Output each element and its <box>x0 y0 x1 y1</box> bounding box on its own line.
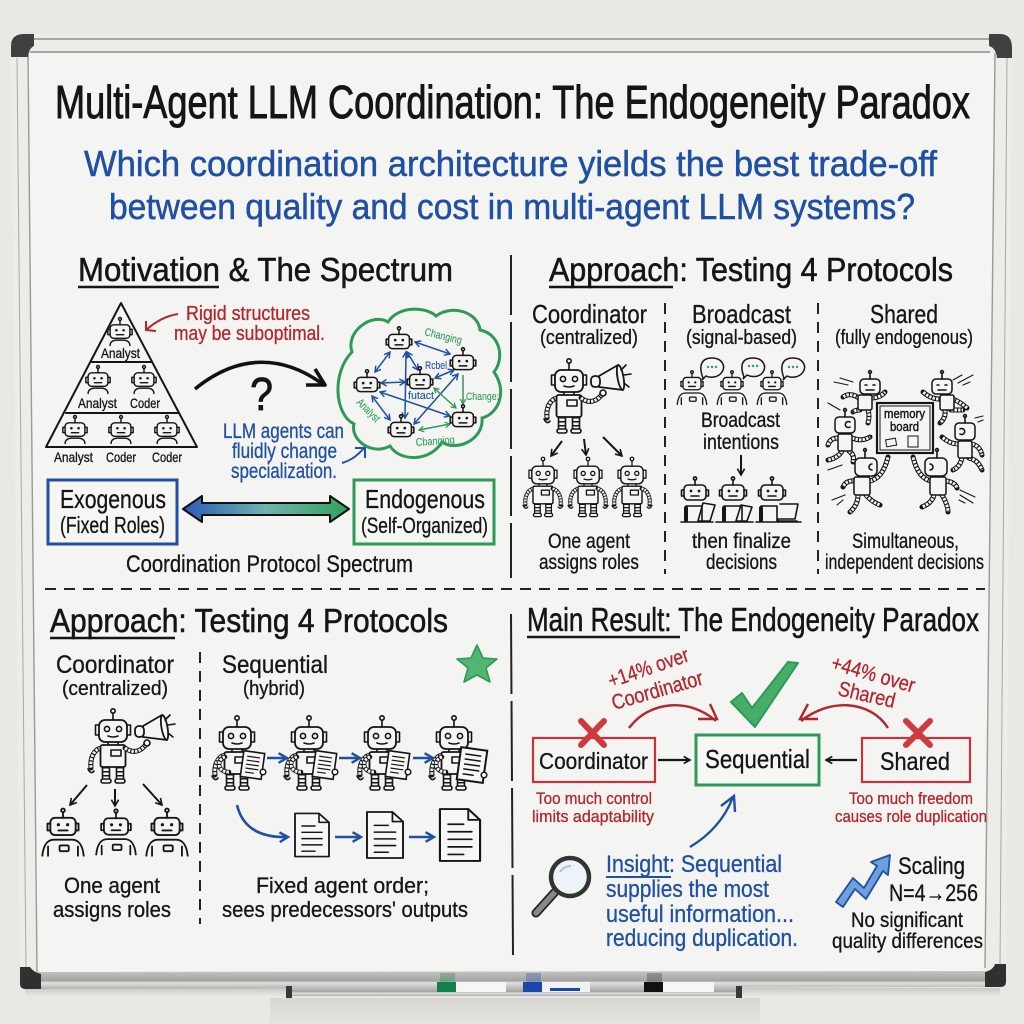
cloud of self-organized agents: Analyst <box>354 397 382 425</box>
insight text: useful information... <box>606 901 794 928</box>
marker: green <box>437 982 506 992</box>
box: endogenous: (Self-Organized) <box>361 513 488 538</box>
blue note: fluid specialization <box>223 420 365 483</box>
cloud of self-organized agents <box>338 309 501 458</box>
heading: approach: Approach: Testing 4 Protocols <box>549 251 953 288</box>
panel: main result <box>527 601 987 953</box>
pyramid of fixed roles <box>46 303 197 465</box>
column: sequential <box>212 645 497 922</box>
insight text: Insight: Sequential <box>606 851 782 878</box>
subtitle question: Which coordination architecture yields the best trade-off <box>84 143 938 184</box>
dancing robot 2 <box>923 371 967 423</box>
column: sequential: Sequential <box>222 651 328 679</box>
note: too much control: Too much control <box>536 789 652 808</box>
scaling text: N=4→256 <box>889 880 978 907</box>
box: exogenous: (Fixed Roles) <box>60 512 165 538</box>
cloud of self-organized agents: Changing <box>423 326 463 347</box>
gain: over coordinator: Coordinator <box>609 667 706 715</box>
column: shared: (fully endogenous) <box>835 327 973 349</box>
note: too much control <box>532 789 654 826</box>
double arrow: spectrum <box>183 496 349 522</box>
column: sequential: Fixed agent order; <box>256 873 429 898</box>
gain: over shared: Shared <box>836 677 898 713</box>
dancing robot 5 <box>843 449 888 512</box>
note: too much freedom: Too much freedom <box>849 789 973 808</box>
note: too much control: limits adaptability <box>532 807 654 826</box>
scaling text <box>832 853 983 953</box>
blue note: fluid specialization: LLM agents can <box>223 420 344 443</box>
column: coordinator lower: assigns roles <box>53 897 171 922</box>
arrow: coordinator to sequential <box>658 759 690 761</box>
box: shared: Shared <box>880 748 950 776</box>
column: shared: Simultaneous, <box>852 530 959 553</box>
icon: scaling arrow <box>836 855 890 907</box>
robots at desks <box>681 477 801 522</box>
scaling text: No significant <box>851 909 963 932</box>
scaling text: quality differences <box>832 930 983 953</box>
column: broadcast: intentions <box>703 431 779 454</box>
curved arrow with question mark: ? <box>250 368 273 420</box>
scaling text: Scaling <box>898 853 965 880</box>
arrow: insight to sequential <box>690 796 735 847</box>
column: coordinator lower: Coordinator <box>56 651 174 679</box>
gain: over shared: +44% over <box>829 652 918 698</box>
column: broadcast: Broadcast <box>701 409 780 432</box>
icon: green check <box>731 662 798 727</box>
cloud of self-organized agents: Cbangiog <box>415 434 455 449</box>
blue sequence arrows <box>237 758 434 837</box>
marker: blue <box>523 982 590 992</box>
gain: over shared <box>800 652 918 728</box>
robots with documents <box>212 716 266 790</box>
column: sequential: sees predecessors' outputs <box>222 897 468 922</box>
dancing robot 6 <box>913 449 957 512</box>
marker tray <box>286 973 742 998</box>
panel: motivation and the spectrum <box>46 251 501 578</box>
subtitle question: between quality and cost in multi-agent LLM systems? <box>109 186 915 227</box>
column: coordinator: One agent <box>548 530 630 553</box>
box: sequential <box>696 735 819 785</box>
red note: rigid structures <box>146 303 325 345</box>
arrows to workers <box>551 437 622 456</box>
box: shared <box>862 721 970 782</box>
box: exogenous <box>48 480 177 544</box>
memory board <box>877 403 933 453</box>
column: coordinator lower: (centralized) <box>62 678 168 700</box>
red note: rigid structures: may be suboptimal. <box>174 323 325 345</box>
icon: robot with megaphone <box>88 709 175 783</box>
box: endogenous <box>354 480 494 544</box>
memory board: board <box>890 419 919 434</box>
gain: over coordinator: +14% over <box>605 644 692 693</box>
column: coordinator: assigns roles <box>539 551 639 574</box>
column: sequential: (hybrid) <box>243 678 305 700</box>
pyramid of fixed roles: Coder <box>106 449 136 465</box>
speech bubbles <box>701 358 805 380</box>
column: broadcast: then finalize <box>692 530 791 553</box>
agent network arrows <box>372 342 458 424</box>
red note: rigid structures: Rigid structures <box>186 303 310 325</box>
gain: over coordinator <box>605 644 717 728</box>
box: endogenous: Endogenous <box>365 484 485 514</box>
dancing robot 1 <box>843 371 885 423</box>
column: shared <box>825 299 984 574</box>
blue note: fluid specialization: specialization. <box>231 460 337 483</box>
box: coordinator: Coordinator <box>539 748 648 774</box>
column: broadcast <box>677 299 805 574</box>
arrow: shared to sequential <box>826 759 857 761</box>
box: sequential: Sequential <box>705 744 810 774</box>
icon: coordinator robot with megaphone <box>544 359 631 433</box>
box: coordinator <box>533 721 655 782</box>
marker: black <box>644 982 714 992</box>
column: broadcast: Broadcast <box>692 299 792 329</box>
icon: magnifying glass <box>536 858 589 913</box>
wall shadow under tray <box>270 998 760 1024</box>
column: coordinator lower <box>42 651 188 922</box>
column: coordinator: (centralized) <box>540 327 638 349</box>
heading: motivation: Motivation & The Spectrum <box>78 251 453 288</box>
pyramid of fixed roles: Analyst <box>78 395 117 411</box>
cloud of self-organized agents: Rcbel <box>425 360 447 372</box>
subtitle question <box>84 143 938 227</box>
insight text <box>606 851 798 952</box>
icon: green star <box>457 645 497 682</box>
column: broadcast: decisions <box>706 551 777 574</box>
insight text: reducing duplication. <box>606 925 798 952</box>
box: exogenous: Exogenous <box>60 484 166 514</box>
curved arrow with question mark <box>195 362 325 420</box>
pyramid of fixed roles: Coder <box>152 449 182 465</box>
caption: coordination protocol spectrum: Coordination Protocol Spectrum <box>126 551 413 578</box>
output documents <box>295 813 329 857</box>
column: coordinator lower: One agent <box>64 873 160 898</box>
memory board: memory <box>884 406 925 421</box>
cloud of self-organized agents: futact <box>408 390 434 402</box>
pyramid of fixed roles: Coder <box>130 395 160 411</box>
blue note: fluid specialization: fluidly change <box>232 440 337 463</box>
panel: approach, coordinator vs sequential <box>42 602 497 924</box>
column: coordinator: Coordinator <box>532 299 647 329</box>
column: broadcast: (signal-based) <box>686 327 797 349</box>
dancing robot 3 <box>828 409 870 462</box>
icon: red x <box>581 721 604 745</box>
insight text: supplies the most <box>606 876 769 903</box>
dancing robot 4 <box>942 415 982 470</box>
column: coordinator <box>523 299 652 574</box>
pyramid of fixed roles: Analyst <box>101 345 140 361</box>
icon: red x <box>906 721 930 745</box>
note: too much freedom <box>835 789 987 826</box>
column: shared: Shared <box>870 299 938 329</box>
panel: approach, three protocols <box>523 251 984 574</box>
heading: approach lower: Approach: Testing 4 Protocols <box>50 602 448 639</box>
note: too much freedom: causes role duplication <box>835 807 987 826</box>
pyramid of fixed roles: Analyst <box>54 449 93 465</box>
cloud of self-organized agents: Change: <box>466 391 499 403</box>
